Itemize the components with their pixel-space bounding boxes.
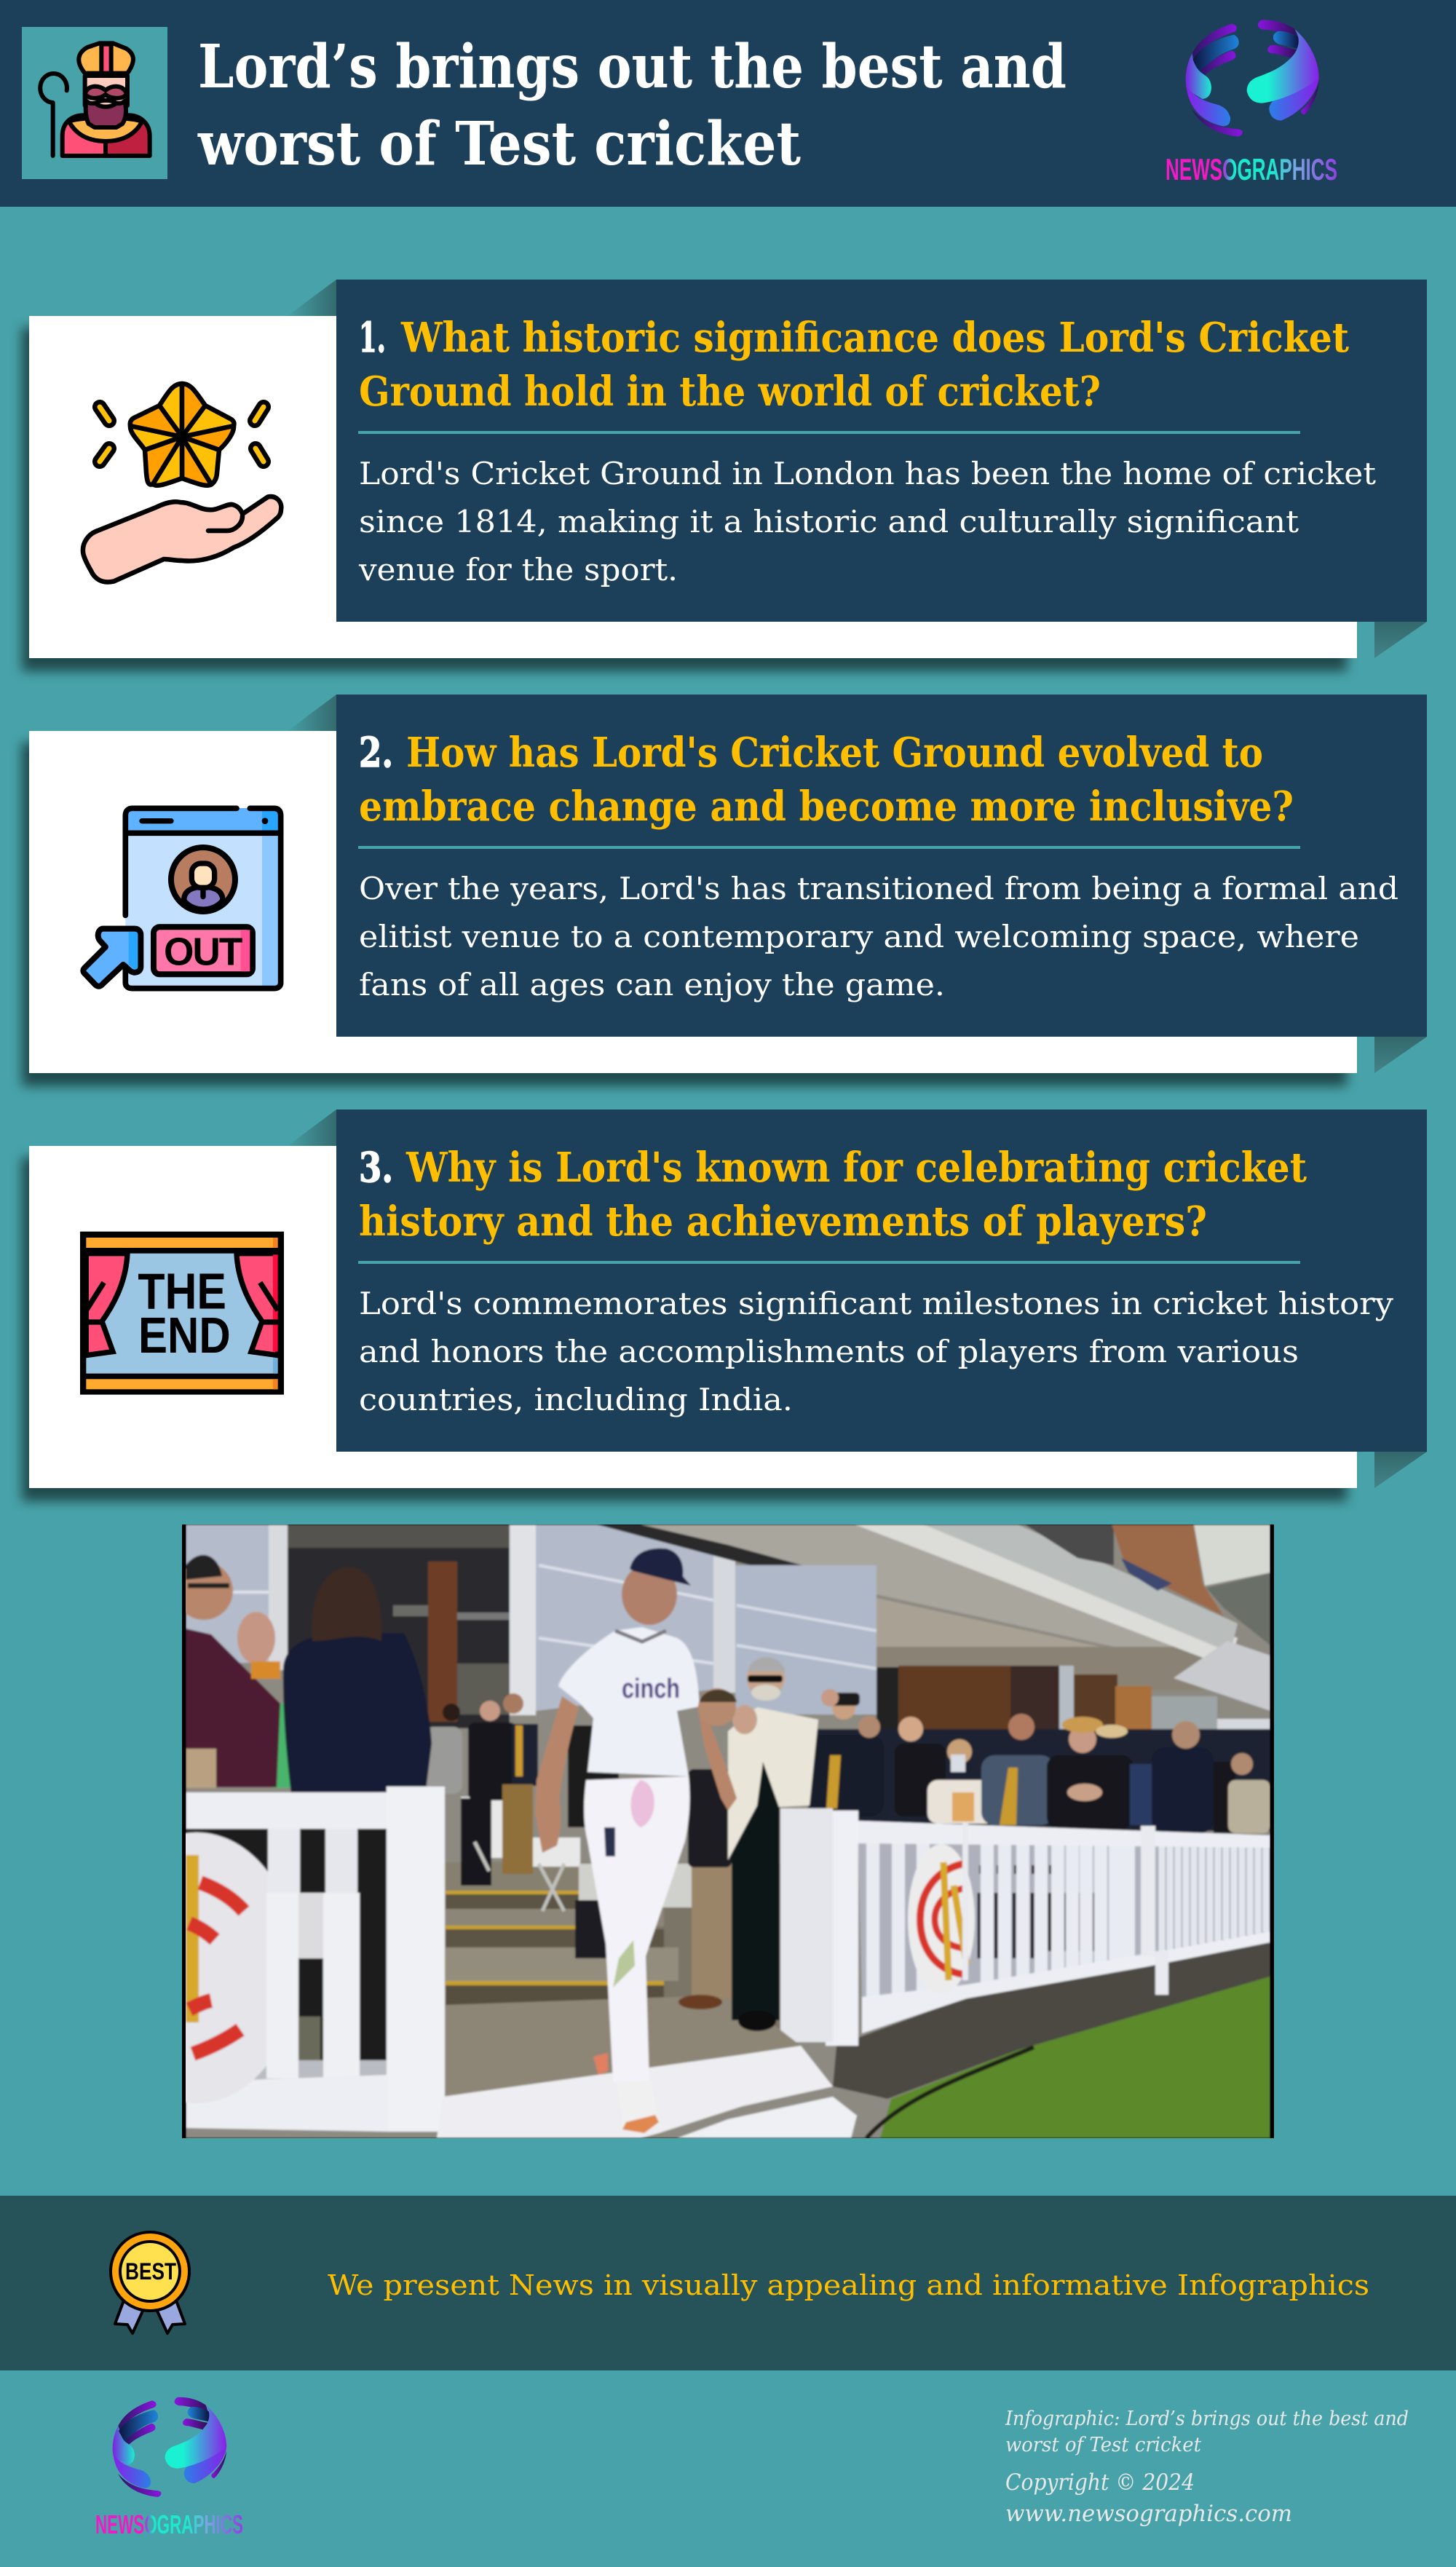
photo: James Anderson walking out at Lord's: cinch bbox=[622, 1674, 680, 1704]
body text 1: Lord's Cricket Ground in London has been the home of cricket bbox=[359, 456, 1376, 491]
tagline: We present News in visually appealing and informative Infographics bbox=[328, 2269, 1369, 2301]
footer credits: worst of Test cricket bbox=[1005, 2434, 1201, 2456]
logo: Newsographics: NEWSOGRAPHICS bbox=[1166, 152, 1337, 186]
man behind player: dark coat and tan trousers bbox=[692, 1864, 735, 1998]
footer tagline band bbox=[0, 2196, 1456, 2370]
white jacket man bbox=[732, 1747, 780, 2020]
title bbox=[197, 32, 1067, 179]
body text 3: countries, including India. bbox=[359, 1382, 793, 1417]
panel 3: celebrating history bbox=[22, 1110, 1427, 1501]
heading 1: 1. bbox=[359, 314, 386, 362]
body text 2: Over the years, Lord's has transitioned from being a formal and bbox=[359, 871, 1398, 906]
body text 1: venue for the sport. bbox=[358, 552, 678, 588]
crowd centre bbox=[424, 1727, 462, 1794]
centre benches and steps bbox=[655, 1864, 780, 2029]
people left bbox=[272, 1703, 292, 1789]
heading 3: Why is Lord's known for celebrating cricket bbox=[405, 1144, 1307, 1192]
icon: bishop with crozier bbox=[22, 27, 167, 179]
panel 2: evolution and inclusion bbox=[22, 695, 1427, 1086]
logo: Newsographics bbox=[1166, 20, 1337, 186]
icon: best badge bbox=[111, 2232, 189, 2333]
footer logo: Newsographics bbox=[95, 2397, 243, 2539]
body text 1 bbox=[358, 456, 1376, 588]
heading 3 bbox=[359, 1144, 1307, 1246]
MCC sign left bbox=[186, 1830, 269, 2104]
footer logo: Newsographics: NEWSOGRAPHICS bbox=[95, 2509, 243, 2539]
body text 3: Lord's commemorates significant milestones in cricket history bbox=[359, 1286, 1393, 1321]
heading 1: What historic significance does Lord's Cricket bbox=[400, 314, 1349, 362]
MCC sign right bbox=[908, 1844, 975, 1994]
panel 1: historic significance bbox=[22, 280, 1427, 671]
header band bbox=[0, 0, 1456, 207]
icon: best badge: BEST bbox=[125, 2258, 176, 2285]
fence right bbox=[858, 1842, 1270, 2002]
kerbs and white steps bbox=[437, 2046, 833, 2138]
body text 3 bbox=[359, 1286, 1393, 1417]
icon: THE END stage curtain bbox=[80, 1232, 284, 1395]
icon: THE END stage curtain: END bbox=[138, 1307, 231, 1364]
footer credits: Infographic: Lord’s brings out the best and bbox=[1005, 2408, 1409, 2430]
photo: James Anderson walking out at Lord's bbox=[95, 1524, 1274, 2138]
title: worst of Test cricket bbox=[197, 109, 801, 179]
body text 2: elitist venue to a contemporary and welcoming space, where bbox=[359, 919, 1359, 954]
icon: THE END stage curtain: THE bbox=[138, 1262, 226, 1319]
text panel 1 bbox=[336, 280, 1427, 622]
heading 1: Ground hold in the world of cricket? bbox=[359, 368, 1101, 416]
body text 3: and honors the accomplishments of players from various bbox=[359, 1334, 1299, 1369]
icon: star above open hand bbox=[83, 384, 281, 582]
heading 3: 3. bbox=[359, 1144, 393, 1192]
white card 3 bbox=[29, 1146, 1357, 1488]
crowd right bbox=[808, 1729, 1270, 1831]
heading 2: embrace change and become more inclusive? bbox=[359, 783, 1294, 831]
white card 1 bbox=[29, 316, 1357, 658]
body text 1: since 1814, making it a historic and culturally significant bbox=[359, 504, 1299, 539]
footer credits: www.newsographics.com bbox=[1005, 2501, 1292, 2527]
body text 2: fans of all ages can enjoy the game. bbox=[359, 967, 945, 1002]
text panel 3 bbox=[336, 1110, 1427, 1452]
icon: OUT profile window with arrow bbox=[83, 808, 281, 989]
body text 2 bbox=[359, 871, 1398, 1002]
white card 2 bbox=[29, 731, 1357, 1073]
footer credits: Copyright © 2024 bbox=[1005, 2469, 1195, 2496]
heading 2 bbox=[359, 729, 1294, 831]
building left bbox=[186, 1524, 269, 1663]
icon: OUT profile window with arrow: OUT bbox=[164, 930, 242, 973]
heading 3: history and the achievements of players? bbox=[359, 1198, 1207, 1246]
title: Lord’s brings out the best and bbox=[198, 32, 1067, 102]
heading 2: 2. bbox=[359, 729, 393, 777]
left fence bbox=[186, 1827, 389, 2078]
player bbox=[584, 1776, 689, 2082]
balcony and pavilion bbox=[855, 1524, 1238, 1667]
heading 1 bbox=[359, 314, 1349, 416]
heading 2: How has Lord's Cricket Ground evolved to bbox=[406, 729, 1263, 777]
man behind player head bbox=[698, 1688, 736, 1726]
text panel 2 bbox=[336, 695, 1427, 1037]
footer credits bbox=[1005, 2408, 1409, 2527]
